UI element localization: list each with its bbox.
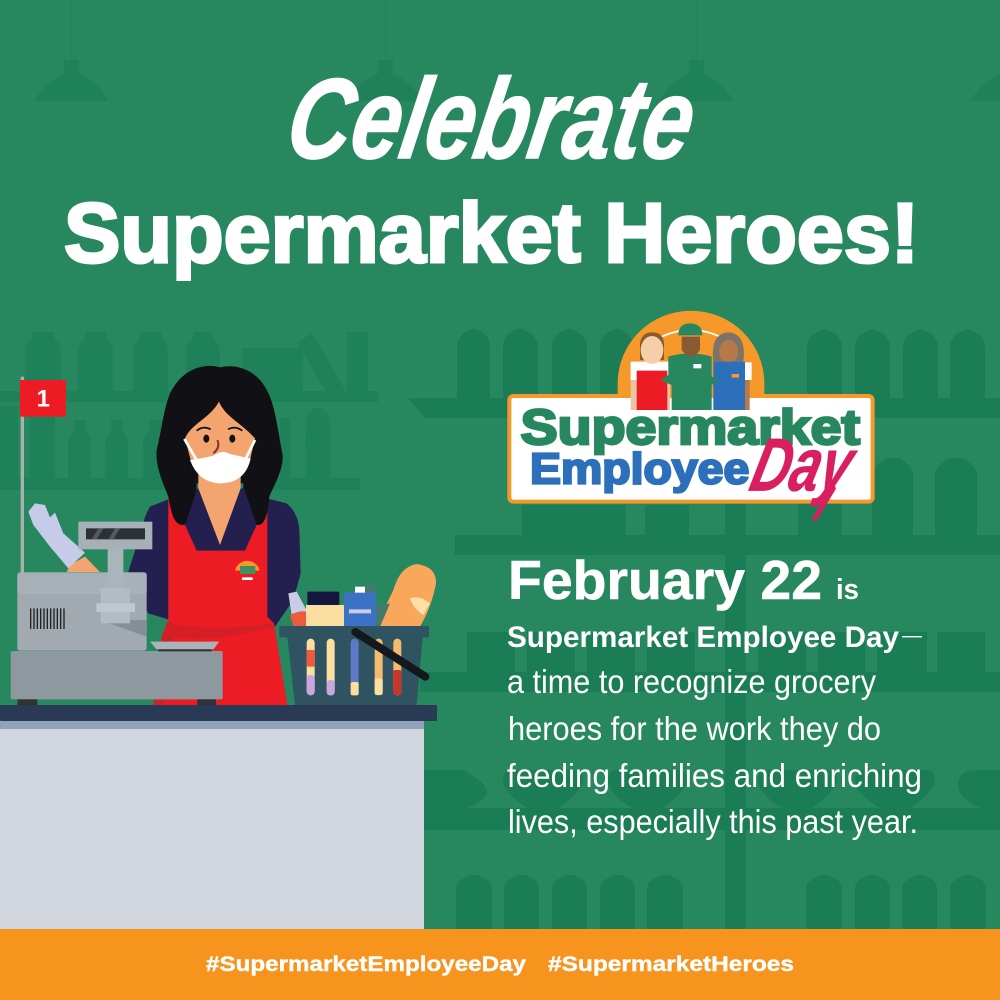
checkout illustration bbox=[11, 366, 436, 705]
logo wordmark: Supermarket bbox=[521, 400, 860, 455]
cash register bbox=[11, 522, 223, 705]
lane flag bbox=[20, 377, 66, 573]
body text: feeding families and enriching bbox=[507, 757, 922, 794]
body text: a time to recognize grocery bbox=[507, 663, 876, 700]
face mask bbox=[190, 452, 251, 483]
title: Celebrate: Celebrate bbox=[279, 56, 705, 183]
lane flag: 1 bbox=[37, 386, 50, 413]
logo arch bbox=[618, 311, 764, 397]
background: left shelves bbox=[0, 332, 378, 490]
checkout counter bbox=[0, 705, 437, 929]
hashtag footer band bbox=[0, 929, 1000, 1000]
Supermarket Employee Day logo bbox=[509, 311, 873, 518]
body text: heroes for the work they do bbox=[508, 710, 881, 747]
title: Supermarket Heroes: Supermarket Heroes! bbox=[64, 186, 919, 280]
logo wordmark: Employee: Employee bbox=[530, 445, 749, 493]
hashtag footer band: #SupermarketEmployeeDay bbox=[206, 953, 526, 976]
logo sign panel bbox=[509, 396, 873, 502]
cashier bbox=[127, 366, 301, 705]
body text: Supermarket Employee Day bbox=[507, 621, 899, 654]
body text: lives, especially this past year. bbox=[508, 803, 918, 840]
logo wordmark: Day: Day bbox=[743, 424, 865, 507]
body text bbox=[507, 621, 922, 840]
logo wordmark: Day bbox=[743, 424, 865, 518]
date heading suffix: is bbox=[836, 574, 859, 606]
gloved hand bbox=[28, 503, 100, 572]
background: hanging lamps bbox=[35, 0, 1000, 101]
background: right shelves bbox=[408, 329, 1000, 929]
logo workers bbox=[631, 323, 752, 410]
grocery basket bbox=[279, 564, 436, 705]
badge bbox=[235, 561, 260, 586]
date heading: February 22 bbox=[508, 549, 822, 611]
hashtag footer band: #SupermarketHeroes bbox=[548, 953, 794, 976]
